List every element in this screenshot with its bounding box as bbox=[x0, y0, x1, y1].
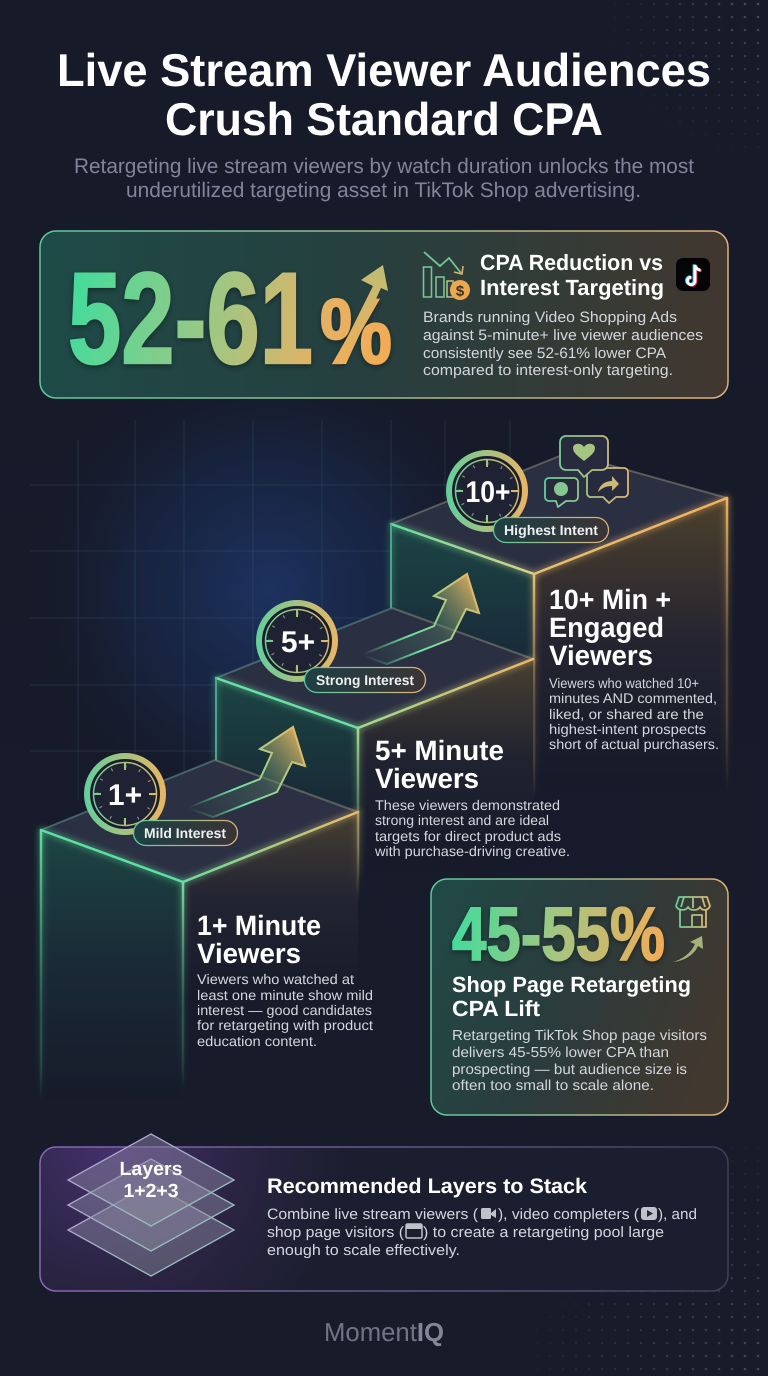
text block: 10+ minute engaged viewers: Viewers who watched 10+ bbox=[549, 675, 699, 691]
arrow: step 1 to step 2 bbox=[187, 727, 305, 817]
icon: falling cost chart bbox=[424, 252, 470, 300]
heading: CPA reduction: CPA Reduction vs bbox=[480, 250, 663, 275]
text block: 1+ minute viewers: least one minute show mild bbox=[197, 987, 373, 1003]
text block: 1+ minute viewers: interest — good candidates bbox=[197, 1002, 372, 1018]
icon: TikTok bbox=[676, 258, 710, 291]
body text: CPA reduction: consistently see 52-61% lower CPA bbox=[423, 345, 666, 362]
text block: 1+ minute viewers: for retargeting with product bbox=[197, 1017, 373, 1033]
text block: 5+ minute viewers bbox=[374, 735, 570, 859]
text block: 5+ minute viewers: These viewers demonstrated bbox=[375, 797, 560, 813]
text block: 10+ minute engaged viewers: minutes AND commented, bbox=[549, 690, 717, 706]
body text: CPA reduction bbox=[423, 309, 703, 379]
text block: 5+ minute viewers: with purchase-driving creative. bbox=[374, 843, 570, 859]
icon: stacked layers bbox=[68, 1134, 234, 1276]
step 3: 10+ minute engaged bbox=[391, 453, 727, 800]
text block: 1+ minute viewers: Viewers who watched at bbox=[197, 971, 354, 987]
icon: rising arrow bbox=[334, 265, 388, 364]
heading: recommended layers: Recommended Layers to Stack bbox=[267, 1175, 587, 1198]
pill: Strong Interest bbox=[304, 668, 426, 692]
arrow: step 2 to step 3 bbox=[361, 574, 479, 664]
body text: CPA reduction: Brands running Video Shopping Ads bbox=[423, 309, 677, 326]
heading: shop page retargeting bbox=[452, 972, 691, 1021]
body text: CPA reduction: against 5-minute+ live viewer audiences bbox=[423, 327, 703, 344]
clock badge: 5+ bbox=[259, 603, 335, 679]
text block: 10+ minute engaged viewers: highest-intent prospects bbox=[549, 721, 706, 737]
text block: 5+ minute viewers: 5+ Minute bbox=[375, 735, 504, 766]
step 1: 1+ minute bbox=[41, 760, 358, 1100]
clock badge: 1+: 1+ bbox=[108, 779, 142, 812]
text block: 10+ minute engaged viewers: Engaged bbox=[549, 612, 664, 643]
subtitle: underutilized targeting asset in TikTok Shop advertising. bbox=[126, 179, 641, 202]
body text: recommended layers: ) to create a retargeting pool large bbox=[423, 1224, 664, 1241]
text block: 10+ minute engaged viewers: 10+ Min + bbox=[549, 584, 671, 615]
subtitle: Retargeting live stream viewers by watch duration unlocks the most bbox=[74, 155, 694, 178]
panel: shop page retargeting bbox=[431, 879, 728, 1115]
pill: Highest Intent bbox=[494, 518, 608, 542]
body text: shop page retargeting: prospecting — but audience size is bbox=[452, 1062, 687, 1078]
text block: 10+ minute engaged viewers bbox=[549, 584, 719, 752]
big stat: 52-61%: % bbox=[320, 281, 392, 383]
text block: 10+ minute engaged viewers: Viewers bbox=[549, 640, 653, 671]
clock badge: 5+: 5+ bbox=[281, 626, 315, 659]
icon: stacked layers: 1+2+3 bbox=[124, 1181, 178, 1202]
body text: shop page retargeting bbox=[452, 1028, 707, 1094]
pill: Strong Interest: Strong Interest bbox=[316, 672, 414, 688]
heading: shop page retargeting: Shop Page Retargeting bbox=[452, 972, 691, 997]
clock badge: 10+ bbox=[449, 453, 525, 529]
body text: shop page retargeting: Retargeting TikTok Shop page visitors bbox=[452, 1028, 707, 1044]
text block: 10+ minute engaged viewers: short of actual purchasers. bbox=[549, 736, 719, 752]
body text: shop page retargeting: delivers 45-55% lower CPA than bbox=[452, 1045, 669, 1061]
body text: recommended layers: shop page visitors ( bbox=[267, 1224, 404, 1241]
heading: CPA reduction: Interest Targeting bbox=[480, 275, 664, 300]
panel: CPA reduction bbox=[40, 231, 728, 398]
body text: shop page retargeting: often too small to scale alone. bbox=[452, 1078, 654, 1094]
heading: shop page retargeting: CPA Lift bbox=[452, 996, 541, 1021]
panel: recommended layers bbox=[40, 1134, 728, 1291]
heading: CPA reduction bbox=[480, 250, 664, 300]
pill: Highest Intent: Highest Intent bbox=[504, 522, 598, 538]
body text: recommended layers: ), video completers ( bbox=[498, 1206, 639, 1223]
big stat: 52-61%: 52-61 bbox=[68, 245, 313, 391]
text block: 1+ minute viewers: education content. bbox=[197, 1033, 317, 1049]
body text: recommended layers bbox=[267, 1206, 697, 1259]
text block: 5+ minute viewers: targets for direct product ads bbox=[375, 828, 561, 844]
icon: stacked layers: Layers bbox=[120, 1159, 182, 1180]
body text: recommended layers: enough to scale effectively. bbox=[267, 1242, 460, 1259]
staircase chart bbox=[41, 436, 727, 1100]
body text: recommended layers: Combine live stream viewers ( bbox=[267, 1206, 478, 1223]
icon: shop with arrow bbox=[673, 897, 710, 962]
text block: 1+ minute viewers: 1+ Minute bbox=[197, 910, 321, 941]
logo: MomentIQ: MomentIQ bbox=[324, 1317, 444, 1347]
title: Live Stream Viewer Audiences bbox=[57, 44, 711, 96]
title bbox=[57, 44, 711, 145]
clock badge: 10+: 10+ bbox=[466, 476, 510, 509]
step 2: 5+ minute bbox=[216, 608, 533, 880]
subtitle bbox=[74, 155, 694, 202]
body text: recommended layers: ), and bbox=[658, 1206, 697, 1223]
big stat: 45-55%: 45-55% bbox=[452, 892, 665, 977]
text block: 5+ minute viewers: strong interest and are ideal bbox=[375, 812, 549, 828]
body text: CPA reduction: compared to interest-only targeting. bbox=[423, 362, 673, 379]
pill: Mild Interest: Mild Interest bbox=[144, 825, 226, 841]
pill: Mild Interest bbox=[134, 820, 238, 846]
text block: 5+ minute viewers: Viewers bbox=[375, 763, 479, 794]
icon: falling cost chart: $ bbox=[456, 283, 465, 300]
icons: heart, comment and share bubbles bbox=[545, 436, 628, 507]
clock badge: 1+ bbox=[87, 756, 163, 832]
text block: 1+ minute viewers bbox=[197, 910, 373, 1049]
title: Crush Standard CPA bbox=[165, 93, 603, 145]
text block: 10+ minute engaged viewers: liked, or shared are the bbox=[549, 706, 704, 722]
text block: 1+ minute viewers: Viewers bbox=[197, 938, 301, 969]
